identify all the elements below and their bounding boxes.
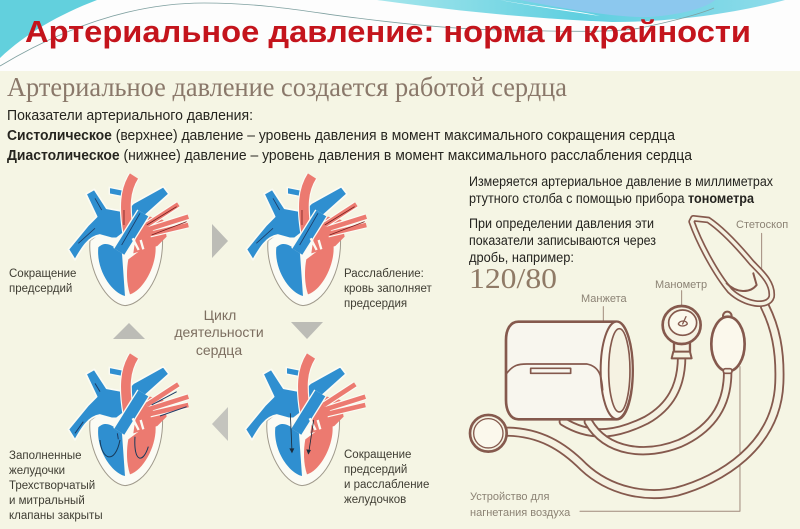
air tubes [563,357,728,451]
title: Артериальное давление: норма и крайности [25,14,751,49]
arrow: right [212,224,228,258]
heart: relaxation [246,176,366,306]
caption: ventricles filled [9,450,103,522]
arrow: left [212,407,228,441]
caption: ventricular relaxation: предсердий [344,464,407,476]
caption: relaxation: Расслабление: [344,268,424,280]
caption: atrial contraction [9,268,76,295]
label: inflation device: нагнетания воздуха [470,507,571,519]
stethoscope [470,218,779,494]
cuff [506,322,633,419]
definitions text [7,108,693,164]
caption: atrial contraction: предсердий [9,283,72,295]
definitions text: Показатели артериального давления: [7,108,253,124]
heart: ventricles filled [68,356,188,486]
inflation bulb [711,312,745,373]
arrow: down [291,322,323,339]
caption: ventricles filled: Трехстворчатый [9,480,95,492]
caption: relaxation: кровь заполняет [344,283,432,295]
tonometer text: При определении давления эти [469,216,654,231]
cycle label [174,307,264,358]
caption: ventricles filled: клапаны закрыты [9,510,103,522]
cycle label: сердца [196,342,242,358]
caption: relaxation [344,268,432,310]
tonometer illustration [470,218,779,511]
tonometer text [469,174,773,265]
label: cuff: Манжета [581,293,628,305]
definitions text: Диастолическое (нижнее) давление – уровень давления в момент максимального расслабления сердца [7,148,693,164]
label: stethoscope: Стетоскоп [736,219,788,231]
definitions text: Систолическое (верхнее) давление – уровень давления в момент максимального сокращения сердца [7,128,676,144]
arrow: up [113,323,145,339]
caption: ventricular relaxation: Сокращение [344,449,411,461]
caption: ventricles filled: и митральный [9,495,85,507]
caption: ventricles filled: желудочки [9,465,65,477]
cycle label: деятельности [174,324,264,340]
caption: ventricles filled: Заполненные [9,450,82,462]
caption: ventricular relaxation: и расслабление [344,479,429,491]
caption: relaxation: предсердия [344,298,407,310]
manometer [663,306,701,358]
subtitle: Артериальное давление создается работой сердца [7,72,567,102]
top wave decoration [0,0,785,66]
tonometer text: дробь, например: [469,250,574,265]
tonometer text: ртутного столба с помощью прибора тонометра [469,191,754,206]
tonometer text: Измеряется артериальное давление в миллиметрах [469,174,773,189]
caption: ventricular relaxation [344,449,429,506]
leader lines [580,233,762,511]
reading 120/80: 120/80 [469,264,557,295]
tonometer text: показатели записываются через [469,233,656,248]
label: manometer: Манометр [655,279,707,291]
heart: atrial contraction [68,176,188,306]
label: inflation device [470,491,571,519]
caption: ventricular relaxation: желудочков [344,494,406,506]
heart: ventricular relaxation [245,356,365,486]
label: inflation device: Устройство для [470,491,549,503]
caption: atrial contraction: Сокращение [9,268,76,280]
cycle label: Цикл [204,307,236,323]
